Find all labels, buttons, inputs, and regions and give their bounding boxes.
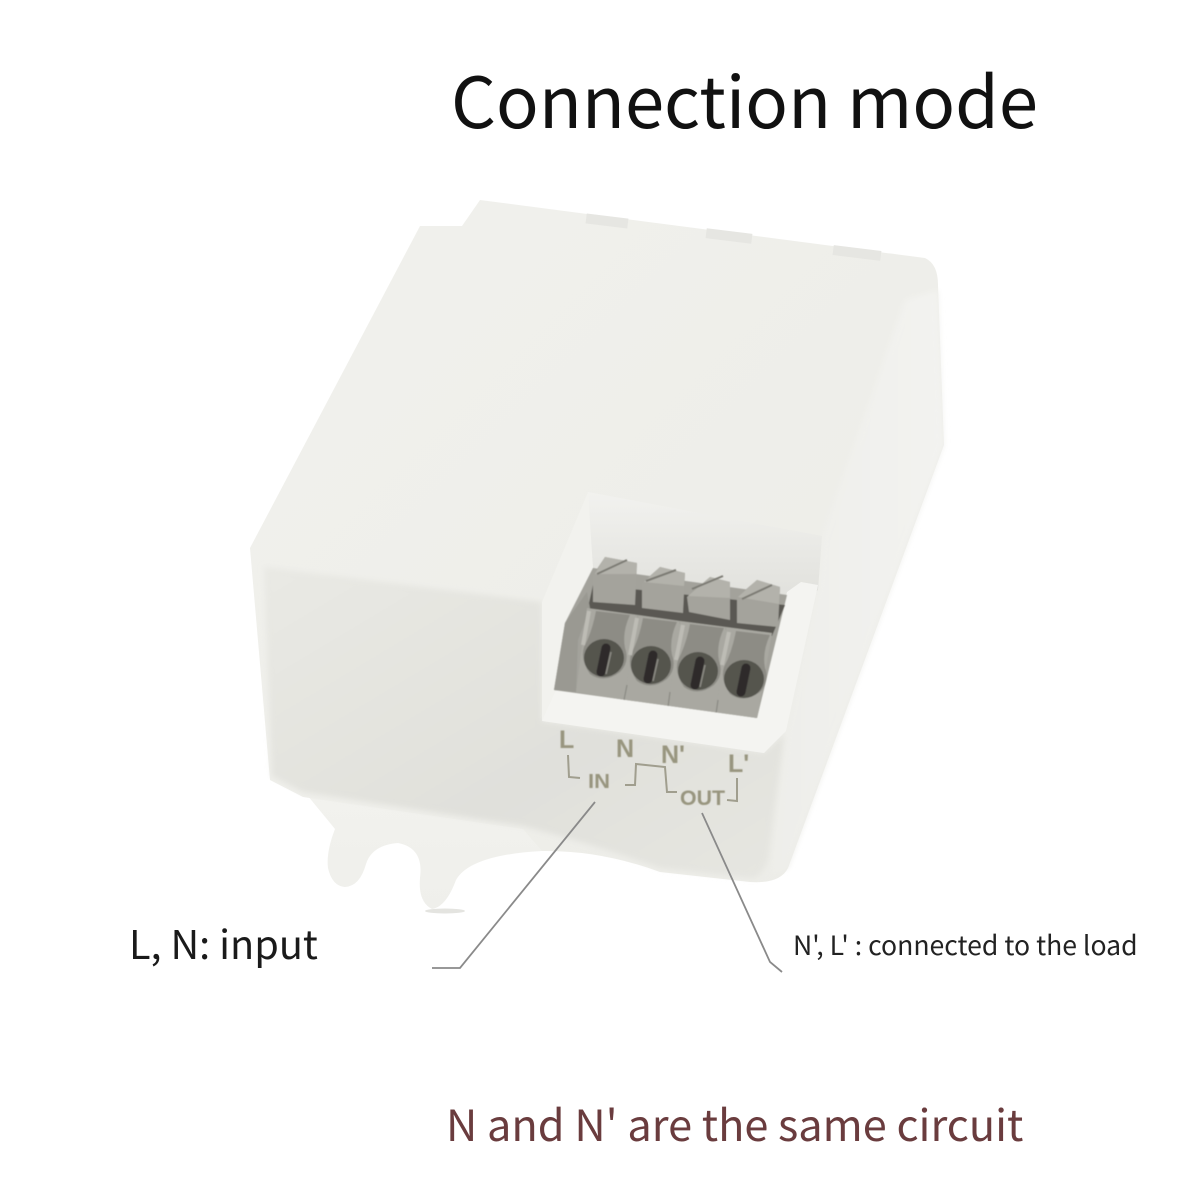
label: output: N', L' : connected to the load (793, 924, 1138, 963)
grey housing (554, 568, 787, 718)
right lip and floor (542, 582, 818, 753)
terminal block (554, 557, 787, 720)
leader line: output (702, 813, 782, 972)
printed terminal labels: OUT (680, 787, 725, 810)
socket ridges (583, 611, 729, 665)
terminal recess (542, 492, 822, 753)
mounting tabs (303, 790, 600, 909)
printed terminal labels: N' (661, 741, 685, 769)
device body silhouette (250, 200, 944, 882)
lever grooves (597, 560, 772, 599)
left bevel of housing (554, 592, 590, 692)
front face (264, 567, 784, 878)
terminal sockets (576, 608, 772, 720)
printed terminal labels (559, 726, 749, 810)
printed bracket lines (568, 755, 737, 801)
back wall (580, 492, 822, 640)
tab shadow (425, 908, 465, 914)
right side face (772, 290, 944, 874)
terminal levers (593, 557, 780, 627)
left wall (542, 492, 593, 721)
printed terminal labels: IN (588, 771, 610, 793)
keyholes (583, 611, 770, 699)
socket dividers (624, 685, 718, 714)
printed terminal labels: L' (728, 750, 749, 778)
device: sensor module (250, 200, 944, 914)
top tabs (586, 213, 881, 261)
printed terminal labels: N (616, 735, 634, 763)
lever top faces (595, 557, 780, 604)
printed terminal labels: L (559, 726, 574, 754)
title: Connection mode (451, 47, 1038, 149)
label: input: L, N: input (129, 914, 318, 971)
leader line: input (432, 802, 595, 968)
socket holes (584, 639, 764, 698)
area behind levers (587, 585, 785, 636)
note: same circuit: N and N' are the same circuit (446, 1092, 1023, 1154)
